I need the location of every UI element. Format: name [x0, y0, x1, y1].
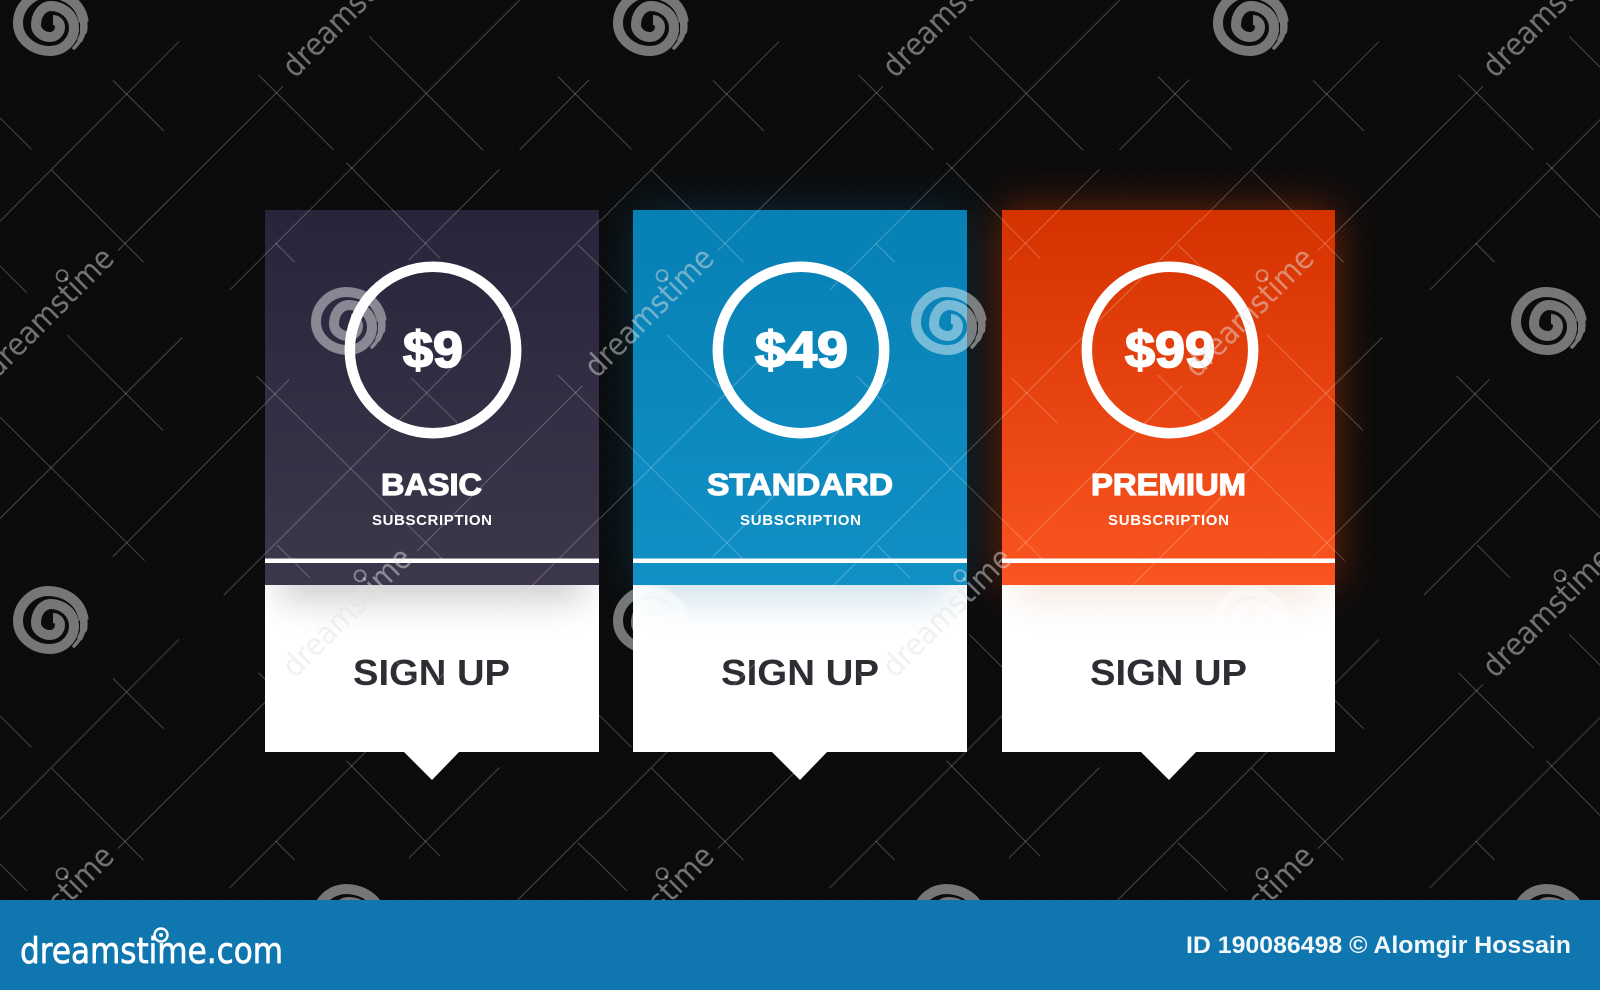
standard divider: [633, 558, 967, 563]
standard price ring: [718, 267, 884, 433]
premium subscription label: SUBSCRIPTION: [1108, 512, 1229, 529]
watermark wordmarks: dreamstime: [1177, 240, 1321, 385]
premium sign up button: [1002, 585, 1335, 780]
watermark wordmarks: dreamstime: [577, 838, 721, 983]
standard subscription label: SUBSCRIPTION: [740, 512, 861, 529]
watermark wordmarks: dreamstime: [875, 540, 1019, 685]
basic sign up button: SIGN UP: [353, 652, 510, 693]
glow: premium card: [1002, 210, 1335, 585]
premium sign up button: SIGN UP: [1090, 652, 1247, 693]
basic divider: [265, 558, 599, 563]
basic sign up button: [265, 585, 599, 780]
premium price: $99: [1125, 321, 1215, 378]
glow: standard card: [633, 210, 967, 585]
basic price ring: [350, 267, 516, 433]
watermark wordmarks: dreamstime: [275, 540, 419, 685]
panel: standard plan: [633, 210, 967, 780]
basic price: $9: [403, 321, 463, 378]
premium price ring: [1087, 267, 1253, 433]
footer logo: dreamstime.com: [20, 931, 283, 972]
premium coloured header: [1002, 210, 1335, 585]
footer bar: [0, 900, 1600, 990]
panel: basic plan: [265, 210, 599, 780]
panel: premium plan: [1002, 210, 1335, 780]
standard sign up button: [633, 585, 967, 780]
watermark wordmarks: dreamstime: [1177, 838, 1321, 983]
basic subscription label: SUBSCRIPTION: [372, 512, 492, 529]
footer image id and credit: ID 190086498 © Alomgir Hossain: [1186, 932, 1571, 959]
standard plan name: STANDARD: [707, 467, 893, 502]
basic coloured header: [265, 210, 599, 585]
premium plan name: PREMIUM: [1091, 467, 1246, 502]
premium divider: [1002, 558, 1335, 563]
standard coloured header: [633, 210, 967, 585]
standard price: $49: [755, 321, 848, 378]
standard sign up button: SIGN UP: [721, 652, 879, 693]
watermark wordmarks: dreamstime: [577, 240, 721, 385]
basic plan name: BASIC: [381, 467, 482, 502]
